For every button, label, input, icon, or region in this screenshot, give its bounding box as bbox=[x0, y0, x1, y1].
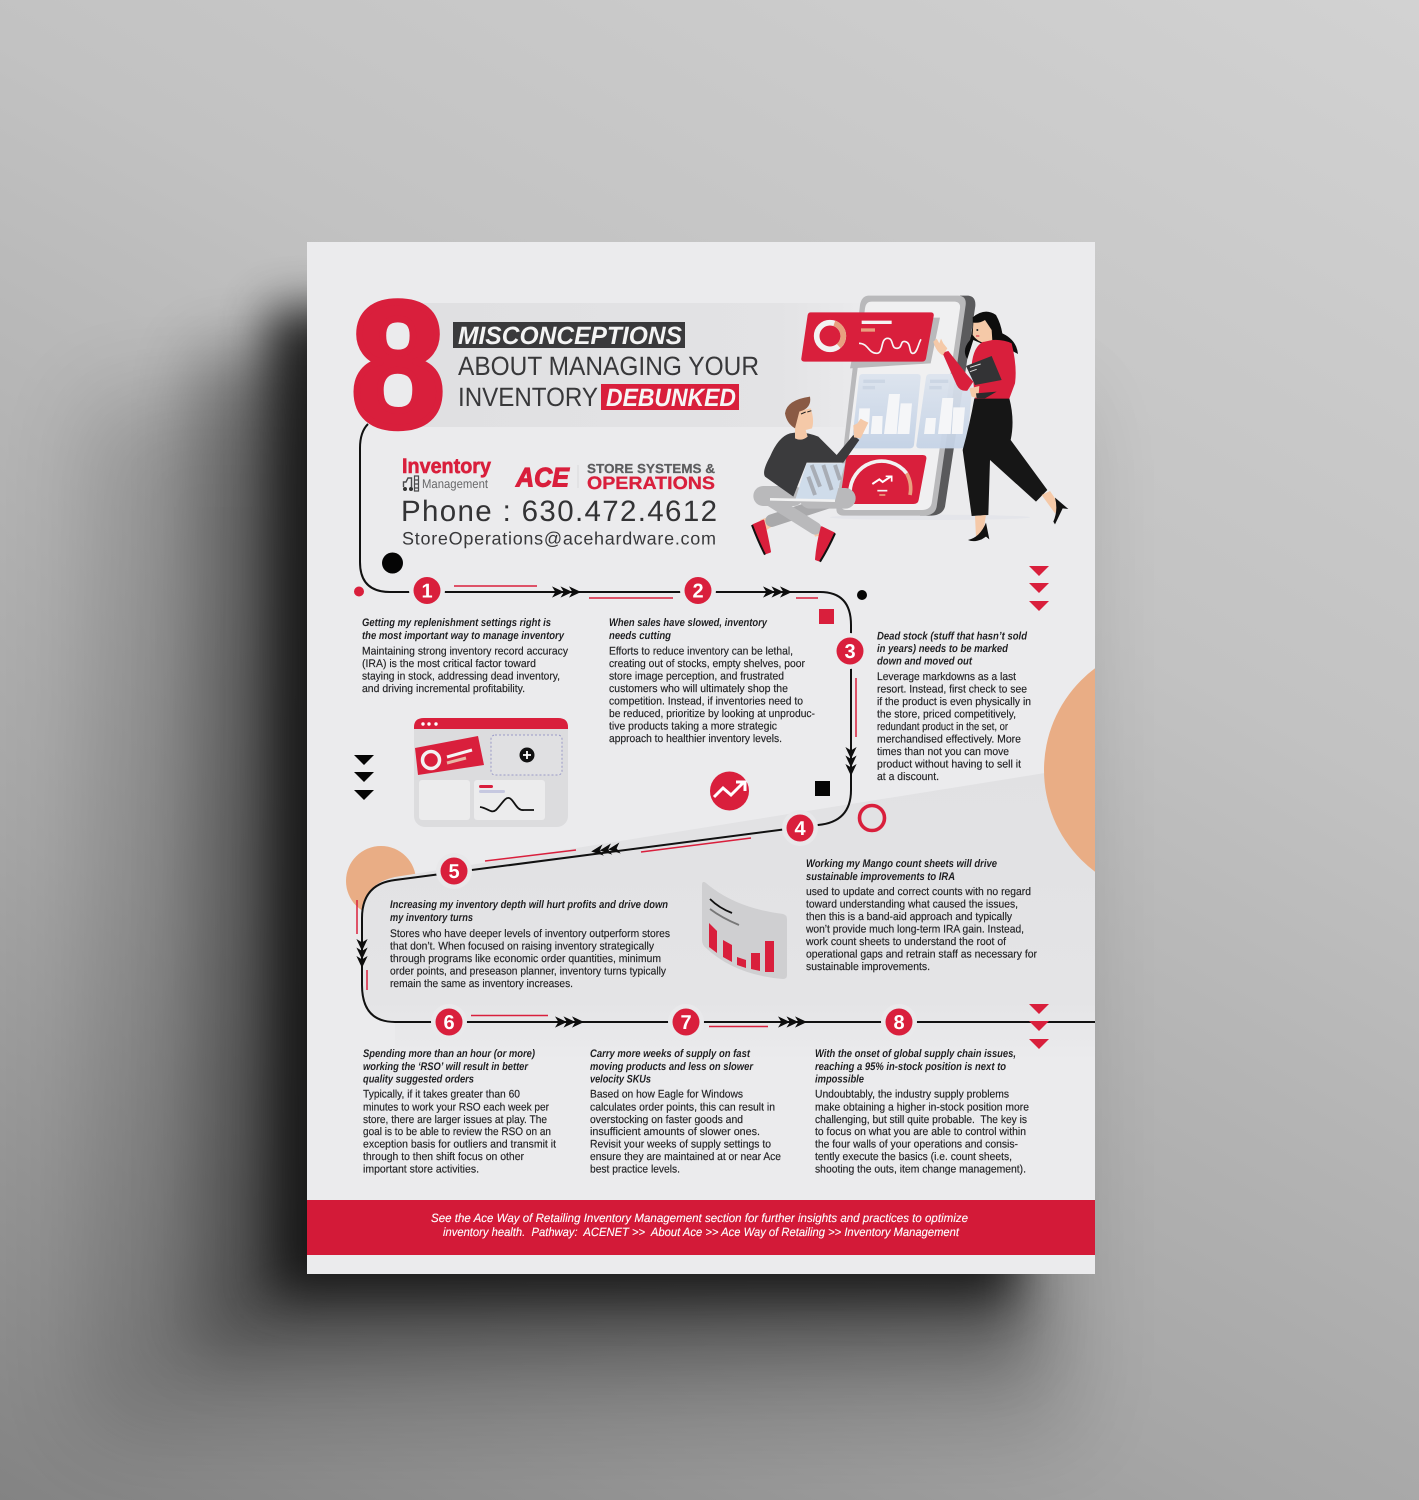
text block 7: overstocking on faster goods and bbox=[590, 1114, 743, 1126]
text block 6: goal is to be able to review the RSO on an bbox=[363, 1126, 551, 1138]
text block 6: minutes to work your RSO each week per bbox=[363, 1102, 549, 1114]
tight dark shadow bbox=[268, 308, 1013, 1298]
title: MISCONCEPTIONS bbox=[458, 322, 682, 350]
lower gray background bbox=[364, 774, 1095, 922]
badge 4 bbox=[782, 810, 818, 846]
text block 2: store image perception, and frustrated bbox=[609, 670, 784, 682]
text block 1: (IRA) is the most critical factor toward bbox=[362, 658, 536, 670]
text block 5: remain the same as inventory increases. bbox=[390, 978, 573, 990]
icon: trend circle bbox=[710, 772, 749, 810]
text block 2: When sales have slowed, inventory bbox=[609, 617, 768, 629]
text block 5: Stores who have deeper levels of inventory outperform stores bbox=[390, 928, 670, 940]
text block 7: ensure they are maintained at or near Ace bbox=[590, 1151, 781, 1163]
text block 3: times than not you can move bbox=[877, 746, 1009, 758]
text block 2 bbox=[609, 617, 815, 745]
text block 7: best practice levels. bbox=[590, 1164, 680, 1176]
badge 2: 2 bbox=[692, 580, 704, 602]
text block 1: Getting my replenishment settings right is bbox=[362, 617, 551, 629]
chart card right bbox=[916, 374, 973, 448]
triangles bottom right bbox=[1029, 1004, 1049, 1049]
peach circle left bbox=[346, 846, 416, 916]
phone bbox=[836, 296, 975, 516]
text block 6: through to then shift focus on other bbox=[363, 1151, 524, 1163]
text block 2: tive products taking a more strategic bbox=[609, 720, 777, 732]
text block 6 bbox=[363, 1048, 556, 1176]
ground shadow bbox=[830, 515, 1030, 520]
arrows down 5 bbox=[356, 939, 368, 968]
title: ABOUT MANAGING YOUR bbox=[458, 351, 759, 381]
badge 3: 3 bbox=[844, 641, 856, 663]
footer banner bbox=[307, 1200, 1095, 1255]
text block 2: customers who will ultimately shop the bbox=[609, 683, 788, 695]
text block 3: resort. Instead, first check to see bbox=[877, 684, 1027, 696]
arrows right 7 bbox=[778, 1016, 807, 1028]
decorative shapes bbox=[354, 552, 884, 830]
text block 4: operational gaps and retrain staff as necessary for bbox=[806, 948, 1037, 960]
woman bbox=[933, 312, 1068, 541]
text block 4: sustainable improvements. bbox=[806, 961, 930, 973]
text block 8: With the onset of global supply chain issues, bbox=[815, 1048, 1016, 1060]
text block 7: moving products and less on slower bbox=[590, 1061, 754, 1073]
text block 8 bbox=[815, 1048, 1029, 1176]
text block 2: creating out of stocks, empty shelves, poor bbox=[609, 658, 805, 670]
logo: Inventory Management: Management bbox=[422, 477, 488, 491]
text block 7 bbox=[590, 1048, 781, 1176]
big number 8: 8 bbox=[351, 265, 445, 464]
text block 5: Increasing my inventory depth will hurt profits and drive down bbox=[390, 899, 668, 911]
text block 8: make obtaining a higher in-stock position more bbox=[815, 1102, 1029, 1114]
text block 2: needs cutting bbox=[609, 630, 671, 642]
footer banner: See the Ace Way of Retailing Inventory Management section for further insights and practices to optimize bbox=[431, 1211, 968, 1225]
text block 6: Spending more than an hour (or more) bbox=[363, 1048, 535, 1060]
badge 1 bbox=[409, 577, 445, 604]
text block 2: competition. Instead, if inventories need to bbox=[609, 696, 803, 708]
logo: Ace Store Systems and Operations: ACE bbox=[515, 462, 570, 492]
triangles top right bbox=[1029, 566, 1049, 611]
medium shadow bbox=[195, 350, 1025, 1355]
text block 2: Efforts to reduce inventory can be lethal, bbox=[609, 646, 793, 658]
arrows right 6 bbox=[555, 1016, 584, 1028]
logo: Inventory Management bbox=[402, 455, 491, 491]
text block 7: velocity SKUs bbox=[590, 1074, 651, 1086]
text block 3: if the product is even physically in bbox=[877, 696, 1031, 708]
logo: Ace Store Systems and Operations: STORE SYSTEMS & bbox=[587, 461, 715, 476]
peach circle right bbox=[1044, 668, 1095, 872]
man bbox=[752, 397, 868, 562]
dashboard illustration bbox=[414, 718, 568, 827]
text block 8: tently execute the basics (i.e. count sheets, bbox=[815, 1151, 1012, 1163]
text block 3: at a discount. bbox=[877, 771, 939, 783]
text block 6: Typically, if it takes greater than 60 bbox=[363, 1088, 520, 1100]
logo: Ace Store Systems and Operations bbox=[514, 464, 715, 490]
text block 3: Dead stock (stuff that hasn’t sold bbox=[877, 630, 1027, 642]
text block 4: toward understanding what caused the issues, bbox=[806, 898, 1018, 910]
text block 4: work count sheets to understand the root of bbox=[805, 936, 1007, 948]
text block 8: reaching a 95% in-stock position is next to bbox=[815, 1061, 1006, 1073]
text block 1 bbox=[362, 617, 568, 695]
bar chart sheet illustration bbox=[702, 882, 787, 979]
text block 3: the store, priced competitively, bbox=[877, 708, 1016, 720]
arrows right 2 bbox=[763, 586, 792, 598]
text block 3: merchandised effectively. More bbox=[877, 734, 1021, 746]
bottom red gauge card bbox=[840, 455, 926, 504]
text block 5 bbox=[390, 899, 670, 990]
badge 7 bbox=[668, 1004, 704, 1040]
contact details: Phone : 630.472.4612 bbox=[401, 495, 717, 528]
badge 4: 4 bbox=[794, 818, 806, 840]
title: INVENTORY bbox=[458, 382, 598, 412]
text block 8: the four walls of your operations and consis- bbox=[815, 1138, 1018, 1150]
text block 5: order points, and preseason planner, inventory turns typically bbox=[390, 966, 666, 978]
text block 4: then this is a band-aid approach and typically bbox=[806, 911, 1012, 923]
text block 8: to focus on what you are able to control within bbox=[815, 1126, 1026, 1138]
soft wide shadow bbox=[90, 400, 1070, 1430]
text block 7: Based on how Eagle for Windows bbox=[590, 1088, 743, 1100]
text block 6: quality suggested orders bbox=[363, 1074, 474, 1086]
logo: Ace Store Systems and Operations: OPERATIONS bbox=[587, 473, 715, 493]
text block 6: exception basis for outliers and transmit it bbox=[363, 1138, 556, 1150]
text block 5: that don’t. When focused on raising inventory strategically bbox=[390, 940, 654, 952]
text block 4: won’t provide much long-term IRA gain. Instead, bbox=[805, 924, 1024, 936]
text block 3: down and moved out bbox=[877, 656, 973, 668]
people and phone illustration bbox=[752, 296, 1068, 562]
text block 5: my inventory turns bbox=[390, 912, 473, 924]
text block 3 bbox=[877, 630, 1031, 783]
text block 1: the most important way to manage inventory bbox=[362, 630, 565, 642]
contact details: StoreOperations@acehardware.com bbox=[402, 528, 716, 548]
badge 1: 1 bbox=[421, 580, 433, 602]
text block 8: challenging, but still quite probable. The key is bbox=[815, 1114, 1027, 1126]
text block 7: calculates order points, this can result in bbox=[590, 1102, 775, 1114]
text block 7: Carry more weeks of supply on fast bbox=[590, 1048, 751, 1060]
text block 8: impossible bbox=[815, 1074, 864, 1086]
text block 4: Working my Mango count sheets will drive bbox=[806, 858, 997, 870]
text block 1: and driving incremental profitability. bbox=[362, 683, 525, 695]
badge 6 bbox=[431, 1004, 467, 1040]
text block 4 bbox=[805, 858, 1037, 973]
triangles left bbox=[354, 755, 374, 800]
text block 3: in years) needs to be marked bbox=[877, 643, 1008, 655]
arrows right 1 bbox=[552, 586, 581, 598]
text block 7: Revisit your weeks of supply settings to bbox=[590, 1138, 771, 1150]
text block 3: redundant product in the set, or bbox=[877, 721, 1008, 733]
text block 2: approach to healthier inventory levels. bbox=[609, 733, 782, 745]
text block 6: working the ‘RSO’ will result in better bbox=[363, 1061, 529, 1073]
text block 1: staying in stock, addressing dead inventory, bbox=[362, 670, 560, 682]
top red card bbox=[801, 312, 934, 362]
text block 3: Leverage markdowns as a last bbox=[877, 671, 1016, 683]
badge 3 bbox=[836, 633, 864, 669]
text block 8: shooting the outs, item change management). bbox=[815, 1164, 1026, 1176]
arrows down 3 bbox=[845, 747, 857, 776]
badge 7: 7 bbox=[680, 1012, 692, 1034]
text block 3: product without having to sell it bbox=[877, 758, 1021, 770]
step badges bbox=[409, 572, 917, 1040]
badge 8 bbox=[881, 1004, 917, 1040]
footer banner: inventory health. Pathway: ACENET >> About Ace >> Ace Way of Retailing >> Inventory Management bbox=[443, 1225, 960, 1239]
badge 5 bbox=[436, 853, 472, 889]
text block 8: Undoubtably, the industry supply problems bbox=[815, 1088, 1009, 1100]
text block 4: sustainable improvements to IRA bbox=[806, 871, 955, 883]
title bbox=[453, 322, 759, 412]
text block 7: insufficient amounts of slower ones. bbox=[590, 1126, 760, 1138]
process path bbox=[357, 424, 1095, 1026]
badge 5: 5 bbox=[448, 861, 460, 883]
header band bbox=[422, 303, 778, 427]
contact details bbox=[401, 495, 717, 548]
red accent lines bbox=[357, 586, 856, 1026]
text block 2: be reduced, prioritize by looking at unproduc- bbox=[609, 708, 815, 720]
text block 4: used to update and correct counts with no regard bbox=[806, 886, 1031, 898]
text block 6: important store activities. bbox=[363, 1164, 479, 1176]
chart card left bbox=[852, 374, 921, 448]
title: DEBUNKED bbox=[606, 384, 736, 412]
badge 8: 8 bbox=[893, 1012, 905, 1034]
text block 6: store, there are larger issues at play. The bbox=[363, 1114, 547, 1126]
logo: Inventory Management: Inventory bbox=[402, 455, 491, 478]
arrows left 4 bbox=[591, 842, 621, 857]
badge 2 bbox=[680, 577, 716, 604]
badge 6: 6 bbox=[443, 1012, 455, 1034]
text block 5: through programs like economic order quantities, minimum bbox=[390, 953, 661, 965]
text block 1: Maintaining strong inventory record accuracy bbox=[362, 646, 568, 658]
flyer page bbox=[307, 242, 1095, 1274]
